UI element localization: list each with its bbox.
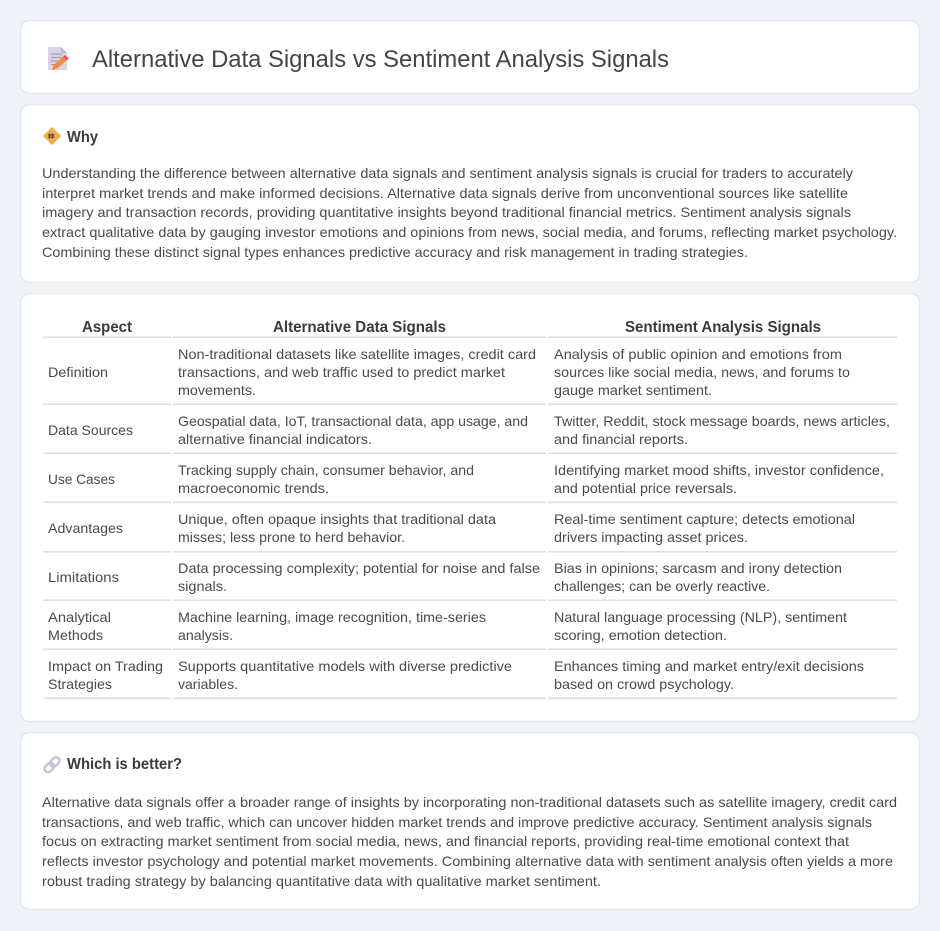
table row: data sources: Twitter, Reddit, stock message boards, news articles,: [554, 413, 890, 429]
table row: definition: Non-traditional datasets like satellite images, credit card: [178, 346, 536, 362]
text block: which is better paragraph: robust trading strategy by balancing quantitative data with qualitative market sentiment.: [42, 873, 601, 889]
table row: limitations: Data processing complexity; potential for noise and false: [178, 560, 540, 576]
text block: which is better paragraph: [42, 794, 897, 889]
table row: advantages: drivers impacting asset prices.: [554, 529, 748, 545]
table row: definition: [43, 346, 897, 405]
table row: advantages: Real-time sentiment capture; detects emotional: [554, 511, 855, 527]
text block: why paragraph: extract qualitative data by gauging investor emotions and opinions from news, social media, and forums, reflecting market psychology.: [42, 224, 897, 240]
table row: analytical methods: Analytical: [48, 609, 111, 625]
text block: which is better paragraph: focus on extracting market sentiment from social media, news, and financial reports, providing real-time emotional context that: [42, 833, 849, 849]
text block: which is better paragraph: transactions, and web traffic, which can uncover hidden market trends and improve predictive accuracy. Sentiment analysis signals: [42, 814, 872, 830]
panel: why: [20, 104, 920, 282]
heading: which is better: Which is better?: [67, 756, 182, 773]
text block: why paragraph: imagery and transaction records, providing quantitative insights beyond traditional financial metrics. Sentiment analysis signals: [42, 204, 851, 220]
table header: Sentiment Analysis Signals: [625, 319, 821, 336]
table row: definition: gauge market sentiment.: [554, 382, 712, 398]
table row: use cases: [43, 462, 897, 503]
table row: limitations: challenges; can be overly reactive.: [554, 578, 770, 594]
table row: use cases: Tracking supply chain, consumer behavior, and: [178, 462, 474, 478]
table row: impact on trading strategies: Supports quantitative models with diverse predictive: [178, 658, 512, 674]
table row: analytical methods: analysis.: [178, 627, 233, 643]
table row: limitations: signals.: [178, 578, 227, 594]
icon: chain link: [43, 756, 61, 774]
text block: why paragraph: Combining these distinct signal types enhances predictive accuracy and risk management in trading strategies.: [42, 244, 748, 260]
icon: diamond sign: [44, 128, 60, 144]
table row: definition: sources like social media, news, and forums to: [554, 364, 850, 380]
table row: data sources: [43, 413, 897, 454]
table row: impact on trading strategies: Impact on Trading: [48, 658, 163, 674]
table row: impact on trading strategies: Strategies: [48, 676, 112, 692]
text block: why paragraph: Understanding the difference between alternative data signals and sentiment analysis signals is crucial for traders to accurately: [42, 165, 853, 181]
table row: data sources: Data Sources: [48, 422, 133, 438]
table row: advantages: [43, 511, 897, 552]
panel: title header: [20, 20, 920, 94]
table row: limitations: Limitations: [48, 569, 119, 585]
table row: analytical methods: Machine learning, image recognition, time-series: [178, 609, 486, 625]
table row: analytical methods: scoring, emotion detection.: [554, 627, 727, 643]
table row: data sources: and financial reports.: [554, 431, 688, 447]
table row: advantages: Advantages: [48, 520, 123, 536]
table row: definition: Definition: [48, 364, 108, 380]
table row: advantages: Unique, often opaque insights that traditional data: [178, 511, 496, 527]
title: Alternative Data Signals vs Sentiment Analysis Signals: [92, 46, 669, 73]
table row: advantages: misses; less prone to herd behavior.: [178, 529, 405, 545]
panel: comparison table: [20, 294, 920, 722]
icon: memo with pencil: [48, 47, 69, 70]
table row: impact on trading strategies: variables.: [178, 676, 238, 692]
table row: use cases: macroeconomic trends.: [178, 480, 329, 496]
table row: data sources: alternative financial indicators.: [178, 431, 372, 447]
table row: definition: Analysis of public opinion and emotions from: [554, 346, 842, 362]
panel: which is better: [20, 732, 920, 910]
text block: why paragraph: interpret market trends and make informed decisions. Alternative data signals derive from unconventional sources like satellite: [42, 185, 848, 201]
table row: analytical methods: [43, 609, 897, 650]
table row: use cases: Use Cases: [48, 471, 115, 487]
table header: Alternative Data Signals: [273, 319, 446, 336]
text block: why paragraph: [42, 165, 897, 260]
heading: why: Why: [67, 129, 98, 146]
table row: definition: movements.: [178, 382, 256, 398]
table row: analytical methods: Methods: [48, 627, 103, 643]
table row: impact on trading strategies: based on crowd psychology.: [554, 676, 734, 692]
text block: which is better paragraph: Alternative data signals offer a broader range of insights by incorporating non-traditional datasets such as satellite imagery, credit card: [42, 794, 897, 810]
table row: use cases: and potential price reversals.: [554, 480, 737, 496]
table row: impact on trading strategies: Enhances timing and market entry/exit decisions: [554, 658, 864, 674]
table row: use cases: Identifying market mood shifts, investor confidence,: [554, 462, 884, 478]
table row: limitations: [43, 560, 897, 601]
table row: impact on trading strategies: [43, 658, 897, 699]
table row: data sources: Geospatial data, IoT, transactional data, app usage, and: [178, 413, 528, 429]
table row: definition: transactions, and web traffic used to predict market: [178, 364, 505, 380]
table row: limitations: Bias in opinions; sarcasm and irony detection: [554, 560, 842, 576]
table row: analytical methods: Natural language processing (NLP), sentiment: [554, 609, 847, 625]
text block: which is better paragraph: reflects investor psychology and potential market movements. Combining alternative data with sentiment analysis often yields a more: [42, 853, 893, 869]
table header: [43, 319, 897, 338]
table header: Aspect: [82, 319, 132, 336]
